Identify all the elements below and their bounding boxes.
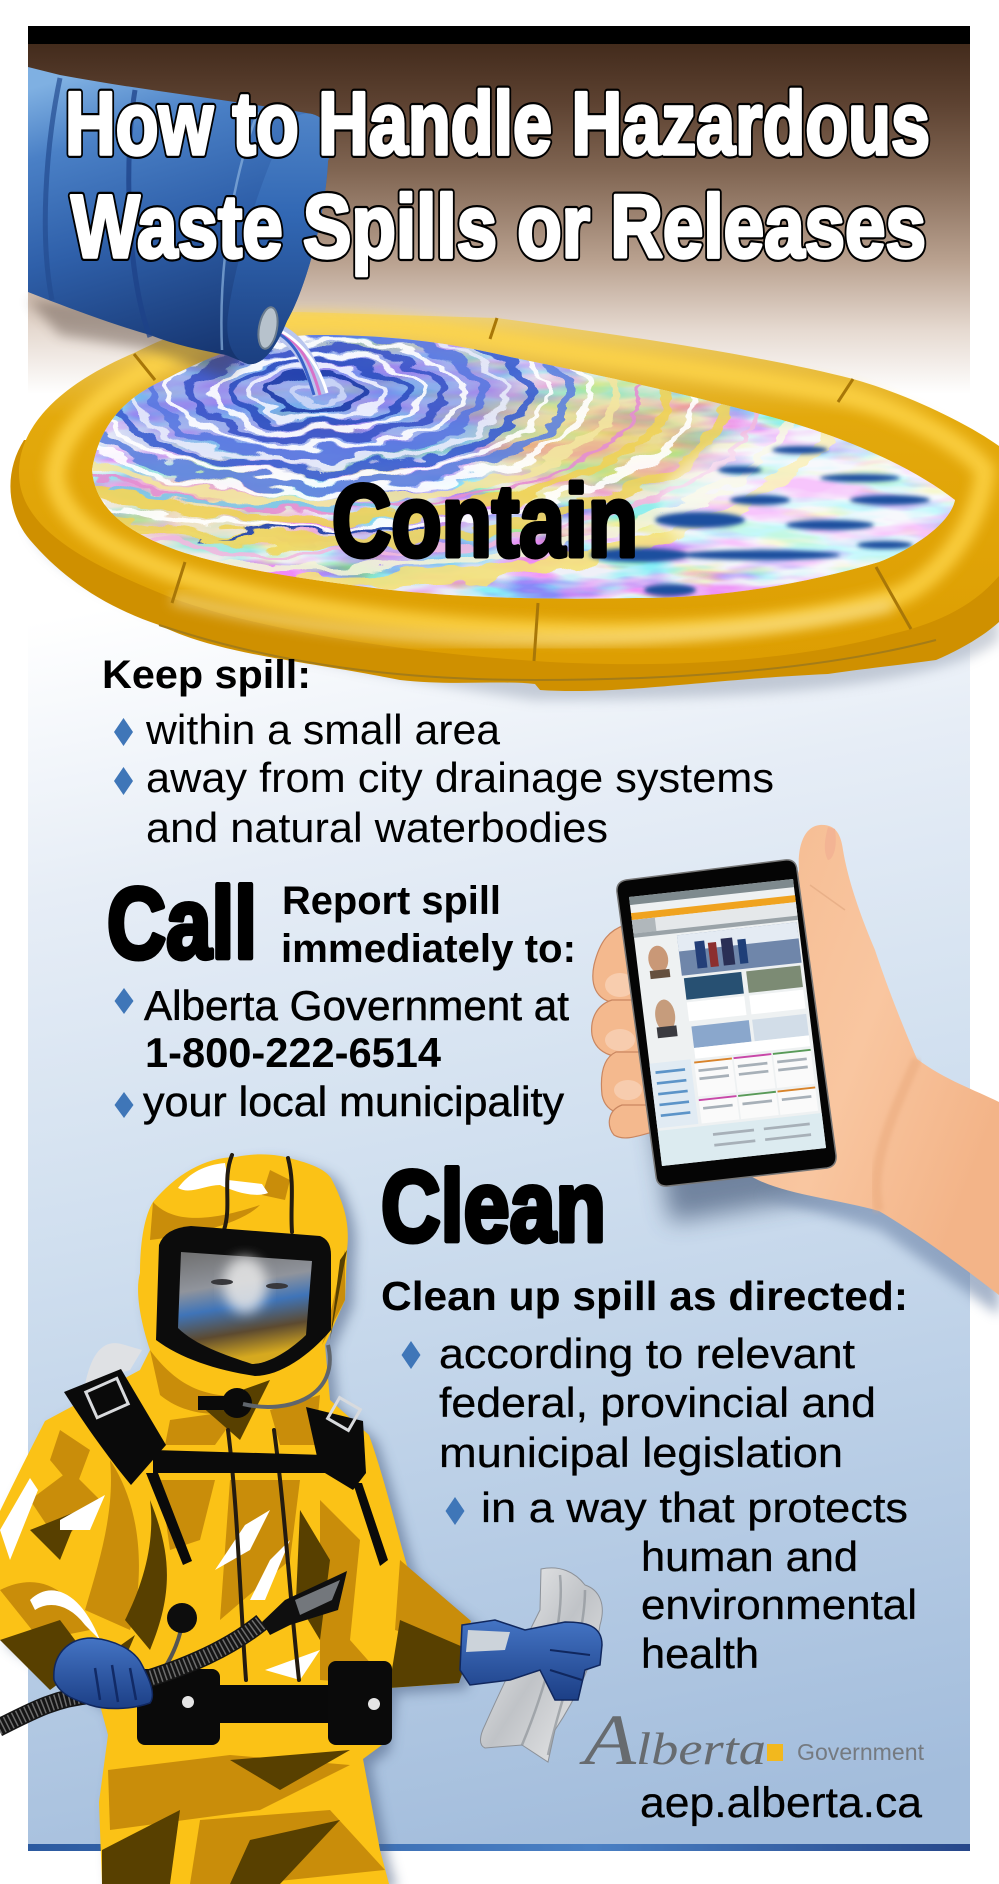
section: clean instructions: in a way that protects: [481, 1484, 908, 1531]
section: contain instructions: Keep spill:: [102, 653, 311, 697]
phone screen: [629, 879, 826, 1166]
right glove: [460, 1620, 602, 1700]
cleaning rag: [480, 1568, 602, 1762]
section: report instructions: your local municipality: [143, 1078, 564, 1125]
boom shadow: [28, 539, 999, 706]
section: clean instructions: Clean up spill as directed:: [381, 1273, 908, 1319]
section: clean instructions: municipal legislation: [439, 1429, 843, 1476]
air hose and nozzle: [0, 1571, 347, 1728]
section: clean instructions: [381, 1273, 917, 1677]
belt with pouches: [137, 1661, 392, 1745]
section: report instructions: Report spill: [282, 879, 501, 923]
suit body: [0, 1154, 471, 1884]
left glove: [54, 1638, 152, 1709]
phone shadow: [639, 1134, 843, 1234]
logo: Alberta Government: Government: [797, 1739, 925, 1765]
boom skirt: [10, 440, 999, 691]
heading: Clean: Clean: [381, 1151, 606, 1263]
website address: aep.alberta.ca: [640, 1779, 922, 1827]
section: clean instructions: environmental: [641, 1581, 917, 1628]
suit shadow: [8, 1160, 479, 1884]
section: contain instructions: within a small area: [145, 706, 501, 753]
section: report instructions: [114, 879, 576, 1125]
air tank: [85, 1343, 142, 1385]
phone body: [617, 860, 836, 1186]
section: clean instructions: federal, provincial and: [439, 1379, 876, 1426]
section: clean instructions: health: [641, 1630, 759, 1677]
oil sheen dark ripples: [590, 446, 930, 596]
section: clean instructions: according to relevant: [439, 1330, 855, 1377]
section: report instructions: 1-800-222-6514: [145, 1029, 442, 1076]
title: [65, 73, 930, 276]
white glare on right: [660, 430, 960, 580]
illustration: spill containment boom: [10, 304, 999, 706]
heading: Contain: Contain: [332, 464, 638, 578]
oil stream: [275, 330, 320, 395]
colour fields: [100, 330, 720, 570]
section: contain instructions: [102, 653, 774, 851]
fingers: [591, 926, 650, 1138]
heading: Call: Call: [107, 868, 257, 980]
harness: [64, 1369, 388, 1566]
illustration: leaking barrel: [28, 67, 331, 378]
suit shading: [0, 1170, 471, 1884]
arm shadow: [760, 1195, 999, 1315]
section: contain instructions: away from city drainage systems: [146, 754, 774, 801]
helmet visor: [156, 1226, 331, 1376]
logo: Alberta Government: Alberta: [579, 1700, 766, 1780]
boom seams: [134, 318, 911, 661]
illustration: hand holding phone: [592, 825, 999, 1315]
logo: Alberta Government: [579, 1700, 925, 1780]
section: clean instructions: human and: [641, 1533, 858, 1580]
oily water surface: [92, 335, 955, 599]
section: contain instructions: and natural waterbodies: [146, 804, 608, 851]
hood lines: [224, 1155, 299, 1680]
illustration: worker in hazmat suit: [0, 1154, 602, 1884]
section: report instructions: Alberta Government at: [144, 982, 569, 1029]
boom ring: [19, 312, 999, 664]
section: report instructions: immediately to:: [281, 927, 576, 971]
hand and arm: [752, 824, 999, 1295]
